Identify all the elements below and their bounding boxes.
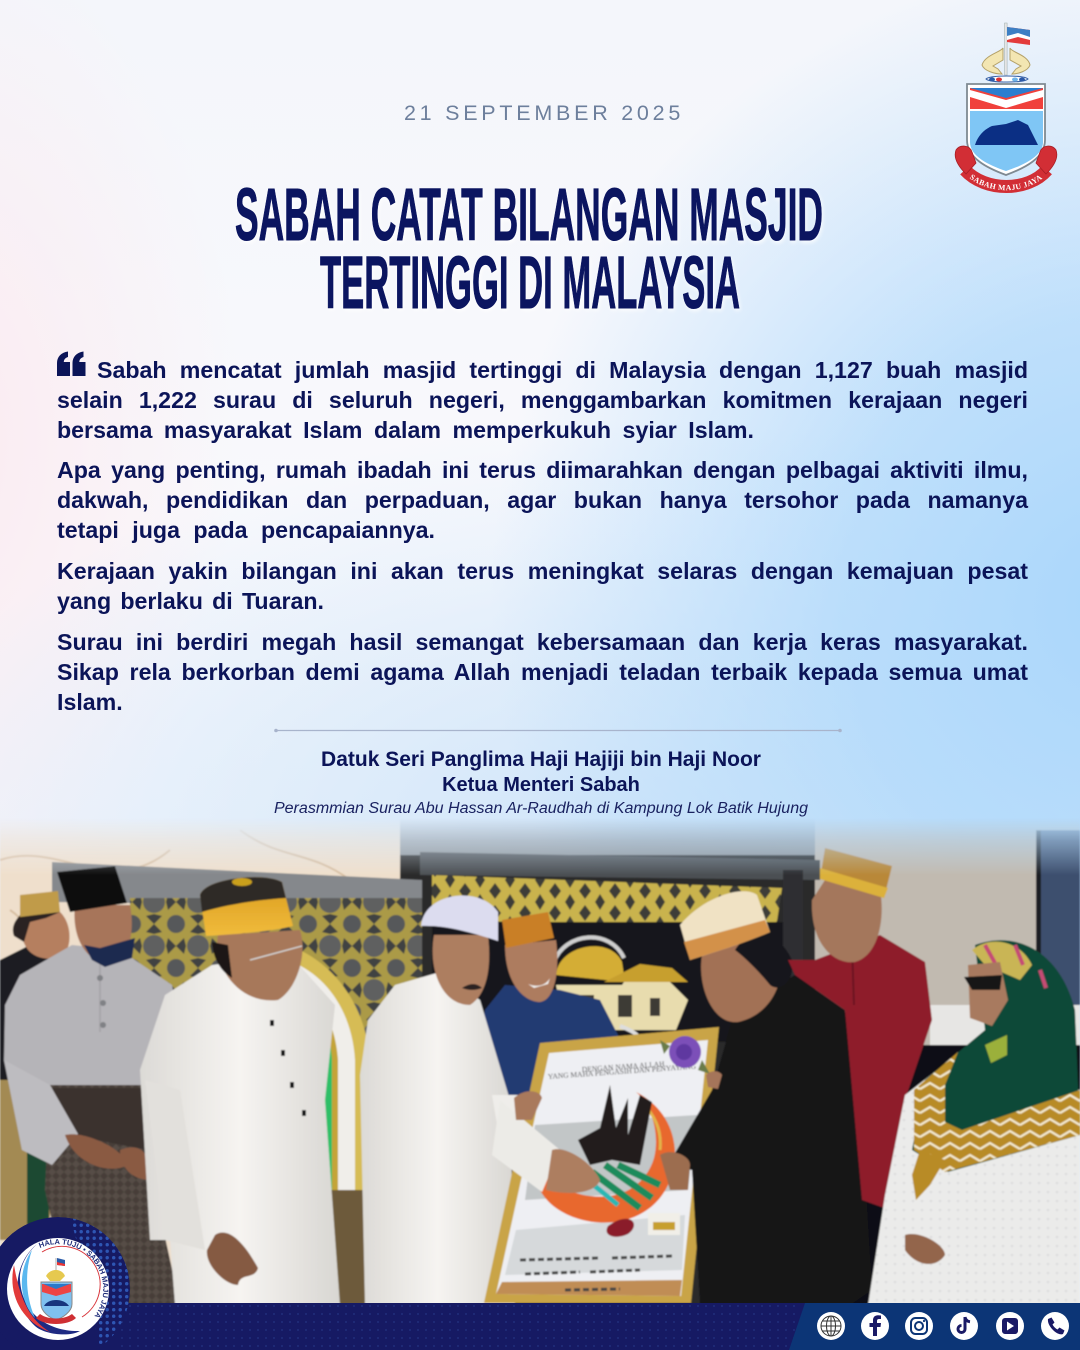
attribution: Datuk Seri Panglima Haji Hajiji bin Haji Noor: [321, 748, 761, 771]
badge: Hala Tuju Sabah Maju Jaya: [0, 1217, 130, 1344]
quote text: Sabah mencatat jumlah masjid tertinggi di Malaysia dengan 1,127 buah masjid: [97, 357, 1028, 383]
badge: Hala Tuju Sabah Maju Jaya: HALA TUJU • SABAH MAJU JAYA: [38, 1239, 108, 1318]
attribution: Perasmmian Surau Abu Hassan Ar-Raudhah di Kampung Lok Batik Hujung: [274, 799, 808, 817]
person: woman in green patterned headscarf: [868, 940, 1080, 1305]
icon: phone: [1041, 1312, 1069, 1340]
attribution: [274, 748, 808, 817]
social icons: [817, 1312, 1069, 1340]
crest: Sabah state coat of arms: [954, 22, 1058, 193]
icon: quotation mark: [57, 352, 86, 376]
framed calligraphy poster: YANG MAHA PENGASIH DAN PENYAYANG: [548, 1062, 697, 1081]
person: man in white robe with gold songkok: [140, 877, 340, 1305]
quote text: tetapi juga pada pencapaiannya.: [57, 517, 435, 543]
icon: facebook: [861, 1312, 889, 1340]
icon: globe: [817, 1312, 845, 1340]
framed calligraphy poster: DENGAN NAMA ALLAH: [582, 1059, 665, 1074]
person: blue baju man: [484, 912, 619, 1096]
photo: presentation of framed calligraphy at surau: [0, 822, 1080, 1303]
icon: instagram: [905, 1312, 933, 1340]
quote text: selain 1,222 surau di seluruh negeri, menggambarkan komitmen kerajaan negeri: [57, 387, 1028, 413]
icon: video: [996, 1312, 1024, 1340]
person: Chief Minister in white robe and white kopiah: [359, 894, 518, 1303]
badge swoosh: [17, 1244, 80, 1334]
quote text: yang berlaku di Tuaran.: [57, 588, 324, 614]
date: 21 SEPTEMBER 2025: [404, 101, 684, 125]
grey marble band: [52, 862, 422, 907]
crest arms: [982, 48, 1030, 74]
divider: [274, 728, 842, 732]
person: man in red baju with brown songkok: [788, 848, 932, 1210]
flower: [669, 1036, 701, 1068]
quote text: Sikap rela berkorban demi agama Allah menjadi teladan terbaik kepada semua umat: [57, 659, 1028, 685]
arch with green light: [299, 951, 366, 1303]
quote text: bersama masyarakat Islam dalam memperkukuh syiar Islam.: [57, 417, 754, 443]
attribution: Ketua Menteri Sabah: [442, 774, 640, 796]
crest flag and pole: [1004, 23, 1030, 75]
crest ribbon: [954, 146, 1058, 193]
title: [235, 173, 824, 324]
footer bar: [0, 1303, 1080, 1350]
crest ribbon: SABAH MAJU JAYA: [970, 174, 1042, 190]
icon: tiktok: [950, 1312, 978, 1340]
person: man in black baju: [660, 891, 872, 1305]
quote text: [57, 357, 1028, 715]
crest wreath: [986, 76, 1028, 82]
quote text: Islam.: [57, 689, 123, 715]
quote text: Apa yang penting, rumah ibadah ini terus diimarahkan dengan pelbagai aktiviti ilmu,: [57, 457, 1028, 483]
dome illustration: [555, 934, 690, 1036]
quote text: dakwah, pendidikan dan perpaduan, agar bukan hanya tersohor pada namanya: [57, 487, 1028, 513]
person: man in grey baju with face mask: [4, 866, 180, 1305]
photo backdrop: marble wall and panels: [0, 815, 1080, 1305]
quote text: Surau ini berdiri megah hasil semangat kebersamaan dan kerja keras masyarakat.: [57, 629, 1028, 655]
crest shield: [967, 84, 1045, 175]
person: far-left man in back: [0, 891, 70, 1080]
presenter sleeve and hands on poster: [492, 1091, 600, 1193]
gold lattice panels: [129, 898, 424, 1035]
quote text: Kerajaan yakin bilangan ini akan terus meningkat selaras dengan kemajuan pesat: [57, 558, 1028, 584]
framed calligraphy poster: [484, 1027, 719, 1303]
badge crest: [36, 1258, 76, 1324]
